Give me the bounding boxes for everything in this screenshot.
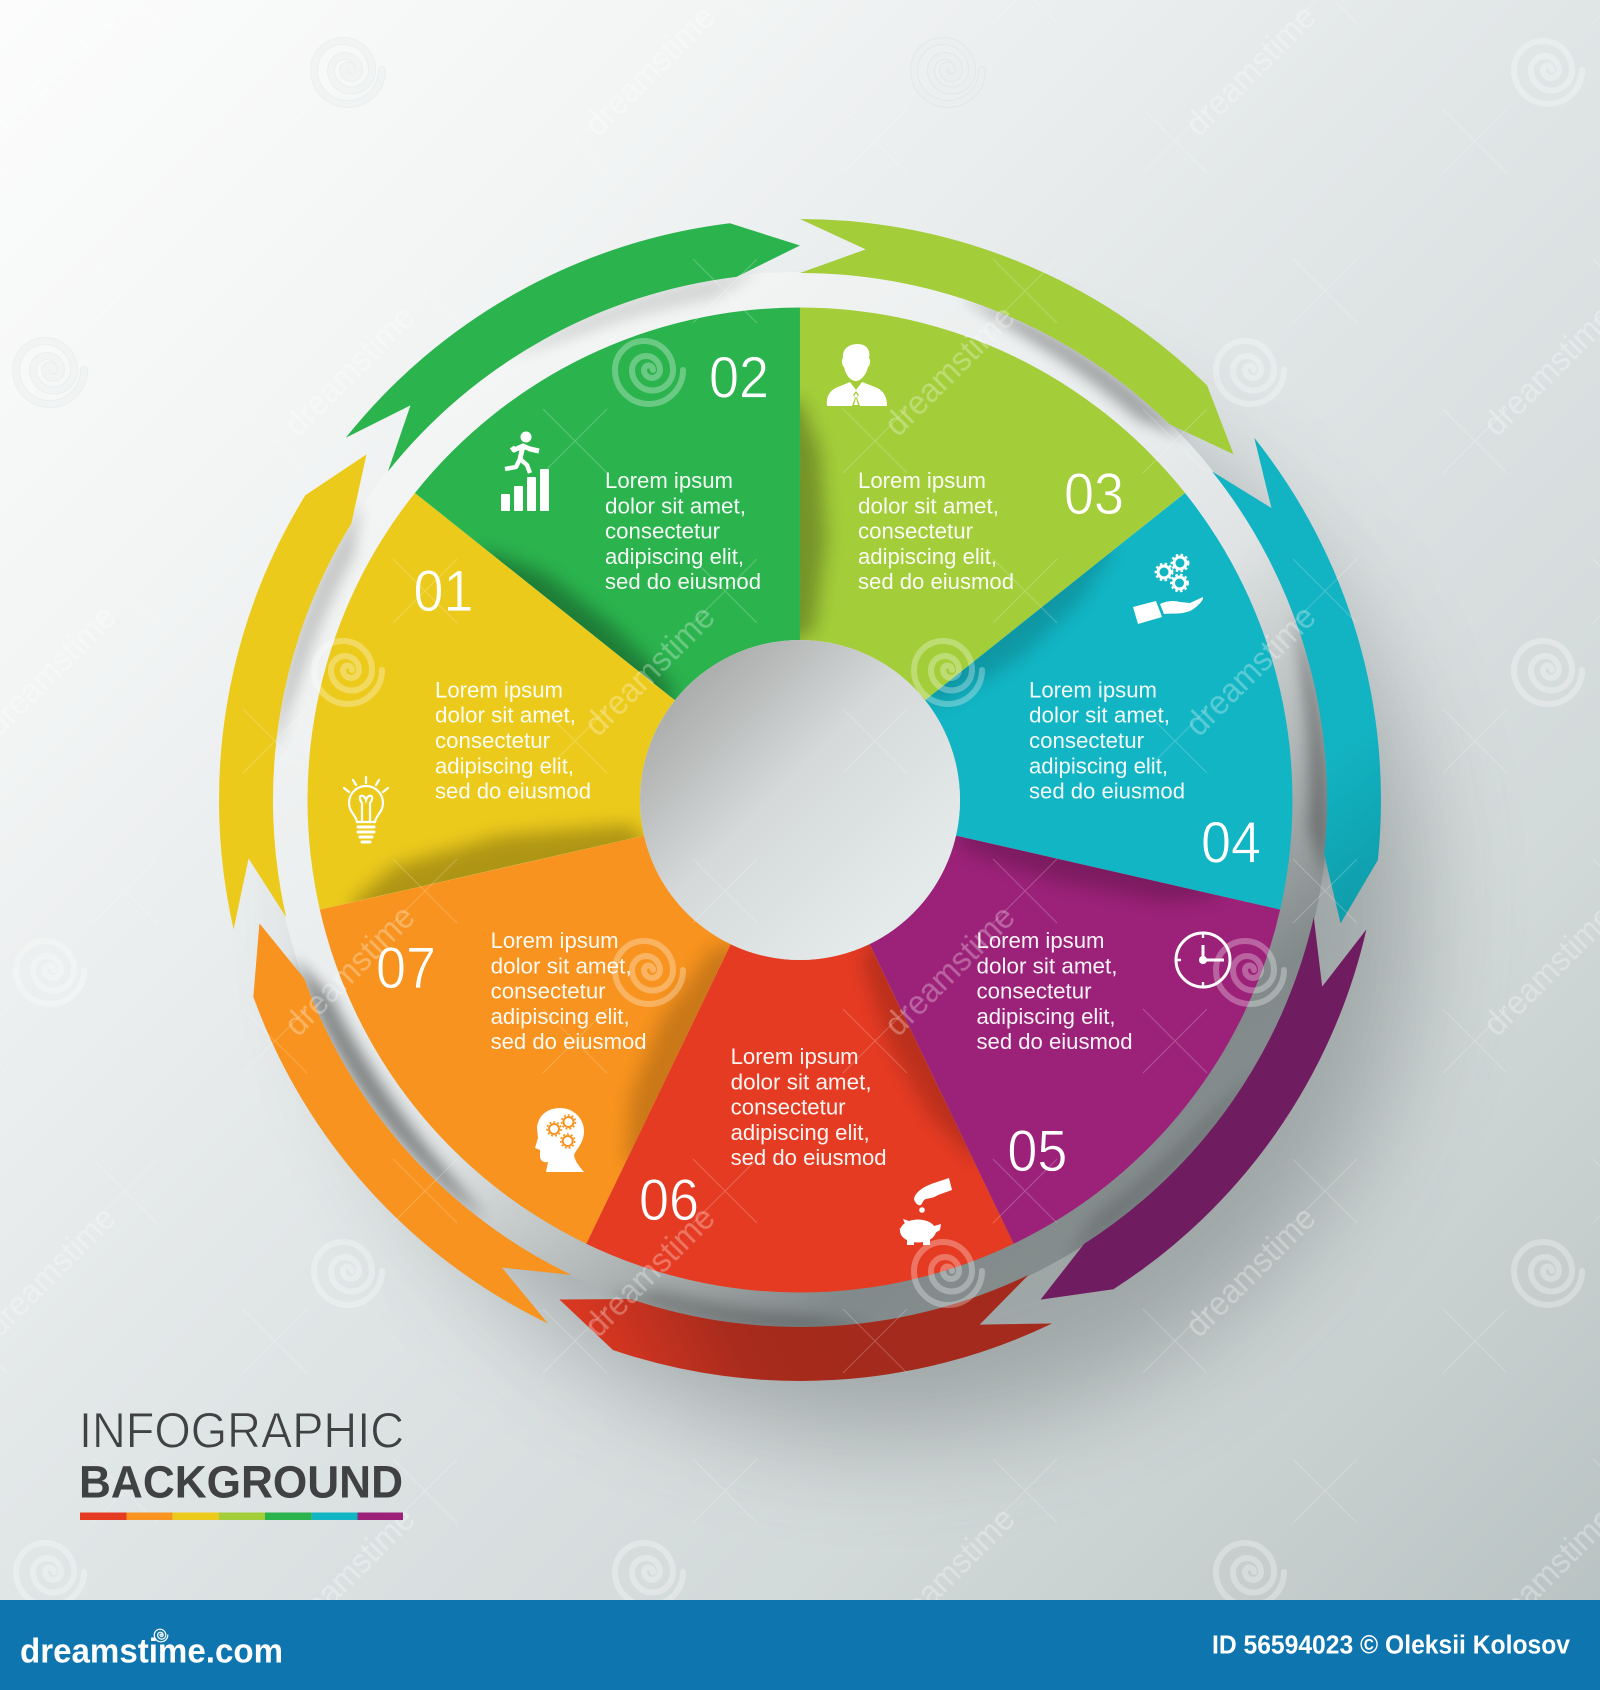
arrow: purple — [1041, 877, 1366, 1352]
text block 05: sed do eiusmod — [976, 1029, 1132, 1054]
sector 05 purple — [870, 836, 1280, 1244]
text block 04: Lorem ipsum — [1029, 677, 1157, 702]
text block 03: dolor sit amet, — [858, 493, 999, 518]
text block 01: consectetur — [435, 728, 551, 753]
text block 01: Lorem ipsum — [435, 677, 563, 702]
text block 05 — [976, 928, 1132, 1054]
sector 07 orange — [320, 836, 730, 1244]
number 05: 05 — [1007, 1119, 1067, 1184]
number 02: 02 — [709, 346, 769, 411]
watermark layer: dreamstime — [277, 898, 423, 1044]
text block 03: sed do eiusmod — [858, 569, 1014, 594]
text block 07: adipiscing elit, — [491, 1004, 630, 1029]
arrow: orange — [157, 923, 650, 1323]
text block 01: sed do eiusmod — [435, 779, 591, 804]
number 04: 04 — [1201, 810, 1261, 876]
watermark layer: dreamstime — [277, 1500, 423, 1646]
icon: hand with gears — [1133, 555, 1203, 624]
arrow: red — [559, 1111, 1052, 1512]
text block 01 — [435, 677, 591, 804]
icon: clock — [1176, 933, 1230, 987]
number 03: 03 — [1064, 462, 1124, 527]
footer credit: ID 56594023 © Oleksii Kolosov — [1212, 1631, 1571, 1659]
pie wheel sectors — [308, 308, 1292, 1292]
watermark layer: dreamstime — [877, 1500, 1023, 1646]
arrow ring — [137, 99, 1525, 1512]
text block 05: consectetur — [976, 979, 1092, 1004]
text block 02 — [605, 468, 761, 594]
text block 02: adipiscing elit, — [605, 544, 744, 569]
sector 06 red — [586, 944, 1014, 1292]
text block 05: Lorem ipsum — [976, 928, 1104, 953]
text block 03: adipiscing elit, — [858, 544, 997, 569]
centre hole — [640, 640, 960, 960]
text block 05: adipiscing elit, — [976, 1004, 1116, 1029]
number 06: 06 — [639, 1168, 699, 1233]
arrow: yellow — [137, 454, 463, 929]
watermark layer: dreamstime — [577, 598, 723, 744]
text block 04: consectetur — [1029, 728, 1145, 753]
icon: runner on bars — [501, 432, 549, 511]
icon: piggy bank with hand — [899, 1178, 952, 1245]
section text blocks — [435, 468, 1185, 1170]
watermark layer: dreamstime — [277, 298, 423, 444]
number 07: 07 — [376, 936, 436, 1001]
footer bar — [0, 1600, 1600, 1690]
text block 04: sed do eiusmod — [1029, 779, 1185, 804]
text block 07: sed do eiusmod — [491, 1029, 647, 1054]
text block 07: Lorem ipsum — [491, 928, 619, 953]
text block 01: dolor sit amet, — [435, 703, 576, 728]
sector 03 lime — [775, 308, 1185, 700]
text block 06: adipiscing elit, — [731, 1120, 870, 1145]
sector 04 teal — [925, 493, 1292, 910]
arrow: lime — [800, 219, 1234, 454]
text block 06: Lorem ipsum — [731, 1044, 859, 1069]
text block 02: Lorem ipsum — [605, 468, 733, 493]
icon: head with gears — [535, 1108, 584, 1172]
number 01: 01 — [414, 559, 474, 624]
title line: infographic: INFOGRAPHIC — [79, 1403, 404, 1459]
text block 02: dolor sit amet, — [605, 493, 746, 518]
arrow: teal — [1070, 438, 1525, 923]
text block 03: consectetur — [858, 519, 974, 544]
text block 07 — [491, 928, 647, 1054]
text block 07: dolor sit amet, — [491, 953, 632, 978]
text block 04: dolor sit amet, — [1029, 703, 1170, 728]
footer logo: dreamstime.com — [20, 1633, 283, 1671]
watermark layer: dreamstime — [577, 1199, 723, 1345]
rainbow underline — [80, 1512, 403, 1520]
text block 02: sed do eiusmod — [605, 569, 761, 594]
icon: businessman — [827, 344, 887, 406]
text block 02: consectetur — [605, 519, 721, 544]
text block 03: Lorem ipsum — [858, 468, 986, 493]
watermark layer: dreamstime — [877, 298, 1023, 444]
section numbers — [376, 346, 1261, 1233]
arrow: green — [346, 99, 800, 584]
text block 06: sed do eiusmod — [731, 1145, 887, 1170]
text block 03 — [858, 468, 1014, 594]
watermark layer: dreamstime — [1178, 1199, 1324, 1345]
text block 07: consectetur — [491, 979, 606, 1004]
text block 04: adipiscing elit, — [1029, 753, 1168, 778]
text block 06 — [731, 1044, 887, 1170]
soft drop shadow of the wheel — [345, 365, 1415, 1435]
icon: light bulb — [344, 777, 388, 842]
title line: background: BACKGROUND — [79, 1456, 403, 1507]
sector 01 yellow — [308, 493, 675, 910]
title — [79, 1403, 404, 1507]
watermark layer: dreamstime — [877, 898, 1023, 1044]
text block 05: dolor sit amet, — [976, 953, 1118, 978]
ring behind the wheel — [272, 272, 1328, 1328]
text block 04 — [1029, 677, 1185, 804]
text block 06: dolor sit amet, — [731, 1069, 872, 1094]
text block 06: consectetur — [731, 1095, 846, 1120]
watermark layer: dreamstime — [1178, 598, 1324, 744]
text block 01: adipiscing elit, — [435, 753, 574, 778]
sector 02 green — [415, 308, 800, 700]
